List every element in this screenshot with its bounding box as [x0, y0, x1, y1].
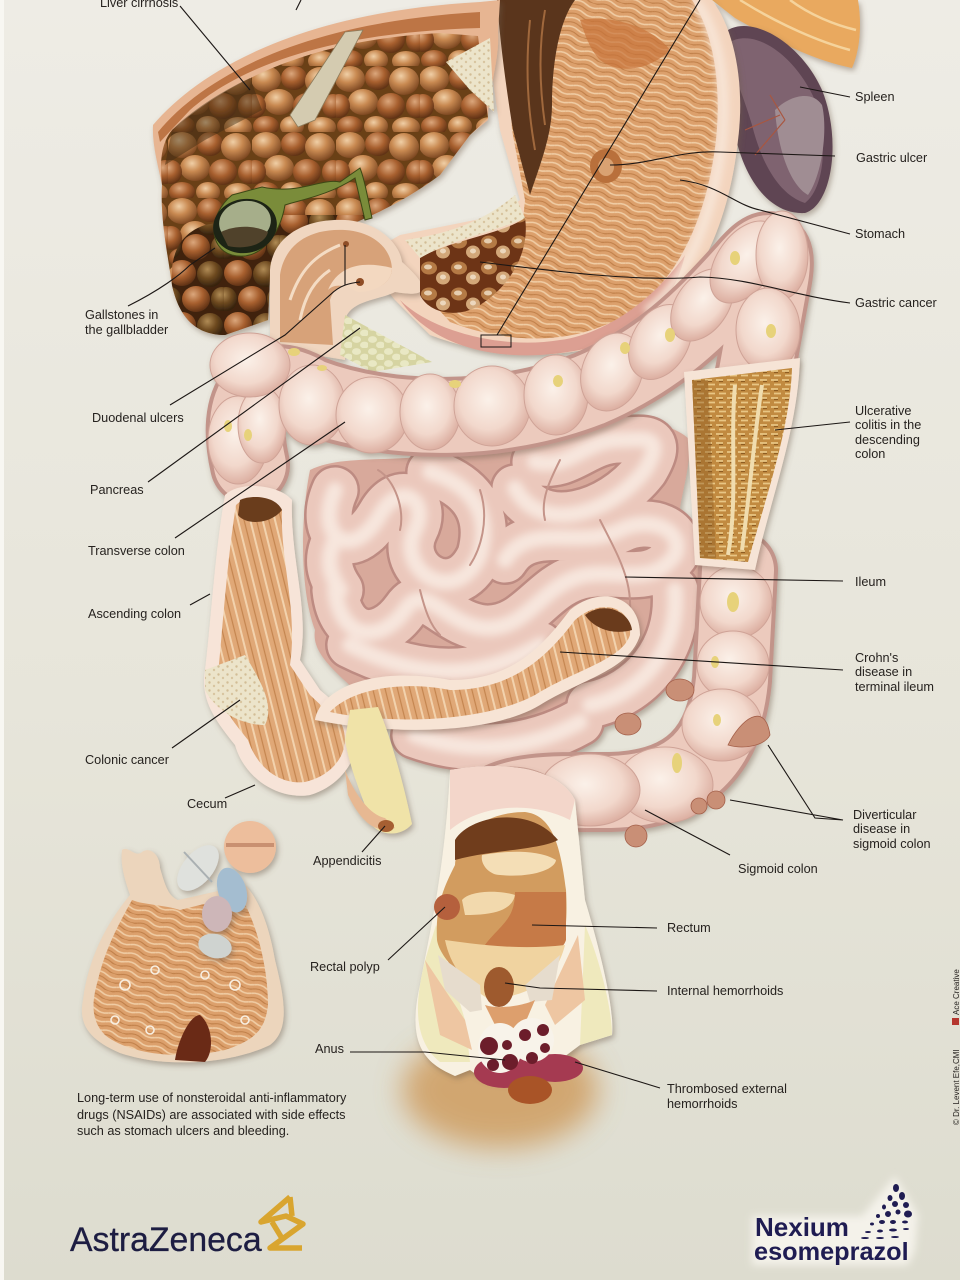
label: Ascending colon: Ascending colon	[88, 607, 181, 621]
text: NSAID note	[77, 1091, 347, 1138]
rectal polyp	[434, 894, 460, 920]
liver cut tissue	[446, 38, 494, 112]
sphincter muscle left	[425, 960, 472, 1050]
oesophagus dark interior	[497, 0, 575, 195]
organ: spleen	[718, 26, 833, 213]
organ: small intestine	[303, 419, 701, 771]
submucosa left	[438, 955, 482, 1012]
label: Thrombosed external hemorrhoids: hemorrhoids	[667, 1097, 738, 1111]
organ: appendix	[345, 707, 412, 834]
label: Colonic cancer: Colonic cancer	[85, 753, 170, 767]
label: Colonic cancer	[85, 700, 240, 767]
label: Duodenal ulcers: Duodenal ulcers	[92, 411, 184, 425]
label: Stomach: Stomach	[855, 227, 905, 241]
label: Thrombosed external hemorrhoids: Thrombosed external	[667, 1082, 787, 1096]
label: Gastric cancer: Gastric cancer	[855, 296, 938, 310]
text: NSAID note: drugs (NSAIDs) are associated with side effects	[77, 1108, 345, 1122]
logo: Nexium esomeprazol: Nexium	[755, 1212, 849, 1242]
label: Ulcerative colitis: colon	[855, 447, 885, 461]
label: Rectum: Rectum	[667, 921, 711, 935]
anal canal	[485, 1000, 535, 1035]
label: Rectum	[532, 921, 711, 935]
label: Stomach	[680, 180, 905, 241]
label: Ulcerative colitis: colitis in the	[855, 418, 921, 432]
label: Diverticular disease: sigmoid colon	[853, 837, 931, 851]
organ: rectum	[415, 766, 612, 1082]
organ: pancreas	[340, 315, 432, 372]
label: Spleen: Spleen	[855, 90, 895, 104]
organ: diverticula	[615, 679, 770, 847]
organ: stomach with oesophagus	[360, 0, 740, 355]
label: Cecum: Cecum	[187, 797, 227, 811]
leader: stomach wall biopsy box	[481, 0, 700, 347]
label: Spleen	[800, 87, 895, 104]
label: Cecum	[187, 785, 255, 811]
pills	[169, 821, 276, 962]
label: Pancreas: Pancreas	[90, 483, 144, 497]
label: Crohn's disease: Crohn's	[855, 651, 898, 665]
organ: gallbladder	[209, 168, 372, 258]
label: Gastric ulcer	[610, 151, 928, 165]
label: Pancreas	[90, 328, 360, 497]
organ: descending colon open section	[684, 358, 800, 570]
organ: duodenum	[270, 220, 422, 360]
label: Rectal polyp: Rectal polyp	[310, 960, 380, 974]
organ: colon band with haustra	[208, 208, 808, 826]
falciform ligament	[290, 30, 363, 127]
submucosa right	[525, 955, 560, 1002]
label: Crohn's disease: terminal ileum	[855, 680, 934, 694]
label: Internal hemorrhoids: Internal hemorrhoids	[667, 984, 783, 998]
label: Diverticular disease: Diverticular	[853, 808, 917, 822]
text: NSAID note: Long-term use of nonsteroidal anti-inflammatory	[77, 1091, 347, 1105]
internal haemorrhoid	[484, 967, 514, 1007]
label: Diverticular disease: disease in	[853, 822, 910, 836]
label: Gallstones in the gallbladder: Gallstones in	[85, 308, 158, 322]
gastric ulcer	[590, 149, 622, 183]
sphincter muscle right	[545, 935, 585, 1025]
label: Appendicitis	[313, 826, 385, 868]
organ: top orange tissue	[712, 0, 860, 68]
panel: stomach section with NSAID damage	[82, 849, 284, 1062]
label: Internal hemorrhoids	[505, 983, 783, 998]
label: Ileum	[625, 575, 886, 589]
organ: anal vessels and external haemorrhoids	[474, 1018, 583, 1104]
label: Transverse colon: Transverse colon	[88, 544, 185, 558]
label: Thrombosed external hemorrhoids	[575, 1062, 787, 1111]
label: Anus	[315, 1042, 505, 1060]
label: Gastric ulcer: Gastric ulcer	[856, 151, 928, 165]
logo: AstraZeneca	[70, 1197, 303, 1259]
label: Sigmoid colon	[645, 810, 818, 876]
label: Ileum: Ileum	[855, 575, 886, 589]
credit: vertical	[952, 969, 960, 1125]
label: Rectal polyp	[310, 907, 445, 974]
label: Diverticular disease	[730, 745, 931, 851]
logo: Nexium esomeprazol: esomeprazol	[754, 1238, 909, 1266]
label: Gallstones in the gallbladder: the gallbladder	[85, 323, 169, 337]
label: Ulcerative colitis: descending	[855, 433, 920, 447]
label: Appendicitis: Appendicitis	[313, 854, 381, 868]
label: Ulcerative colitis	[775, 404, 921, 461]
label: Liver cirrhosis	[100, 0, 250, 90]
label: Crohn's disease: disease in	[855, 665, 912, 679]
logo: Nexium esomeprazol	[752, 1176, 918, 1266]
logo: AstraZeneca: AstraZeneca	[70, 1221, 262, 1259]
colonic cancer	[205, 655, 268, 725]
label: Duodenal ulcers	[92, 245, 360, 425]
leader: top stub	[296, 0, 301, 10]
text: NSAID note: such as stomach ulcers and bleeding.	[77, 1124, 289, 1138]
organ: shadow skin below anus	[402, 1032, 598, 1148]
organ: gastric cancer tumour	[405, 195, 526, 313]
organ: taenia markers	[224, 251, 776, 773]
label: Gallstones in the gallbladder	[85, 248, 215, 337]
organ: liver	[153, 0, 500, 335]
left edge strip	[0, 0, 4, 1280]
label: Crohn's disease	[560, 651, 934, 694]
label: Sigmoid colon: Sigmoid colon	[738, 862, 818, 876]
organ: terminal ileum section	[315, 596, 640, 730]
organ: ascending colon open section with caecum	[204, 486, 358, 796]
label: Anus: Anus	[315, 1042, 344, 1056]
label: Ascending colon	[88, 594, 210, 621]
label: Transverse colon	[88, 422, 345, 558]
label: Ulcerative colitis: Ulcerative	[855, 404, 911, 418]
label: Gastric cancer	[480, 262, 938, 310]
